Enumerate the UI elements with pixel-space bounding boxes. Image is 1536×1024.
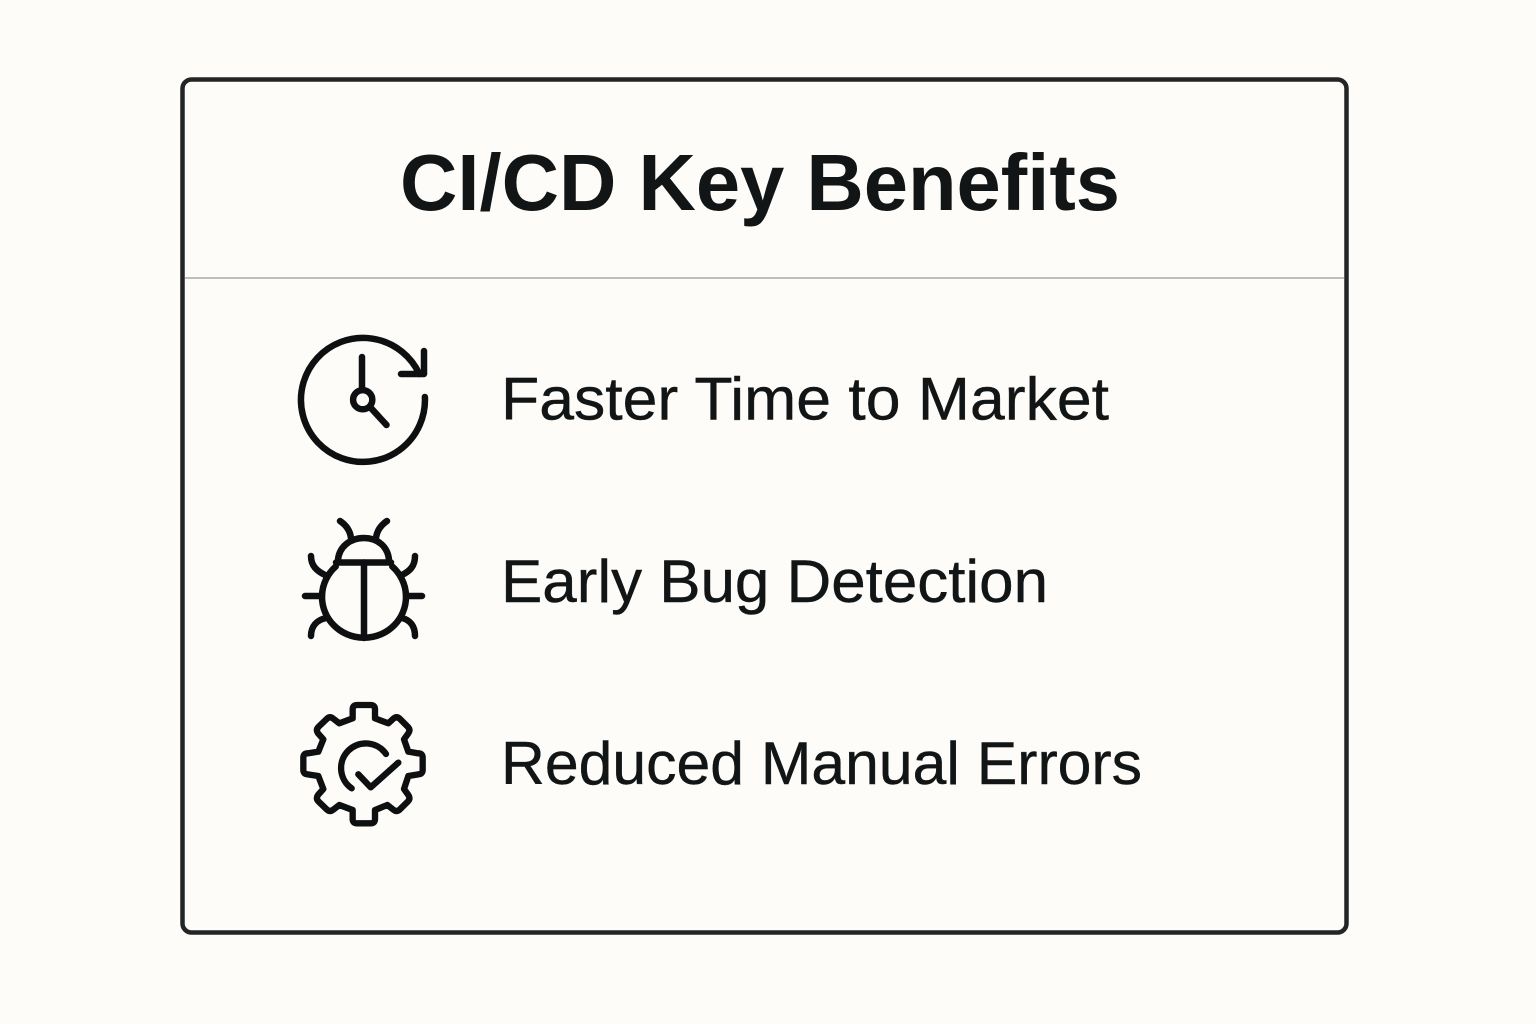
benefit label: early bug detection: Early Bug Detection bbox=[501, 548, 1048, 615]
benefit row: reduced manual errors bbox=[303, 705, 1142, 823]
benefit row: faster time to market bbox=[301, 338, 1109, 462]
icon: clock with circular arrow bbox=[301, 338, 425, 462]
benefit label: reduced manual errors: Reduced Manual Errors bbox=[501, 730, 1142, 797]
icon: bug bbox=[305, 521, 422, 638]
benefit row: early bug detection bbox=[305, 521, 1048, 638]
benefit label: faster time to market: Faster Time to Market bbox=[501, 366, 1109, 432]
panel: CI/CD key benefits card bbox=[182, 80, 1346, 932]
title: CI/CD Key Benefits bbox=[400, 138, 1120, 227]
icon: gear with check mark bbox=[303, 705, 423, 823]
